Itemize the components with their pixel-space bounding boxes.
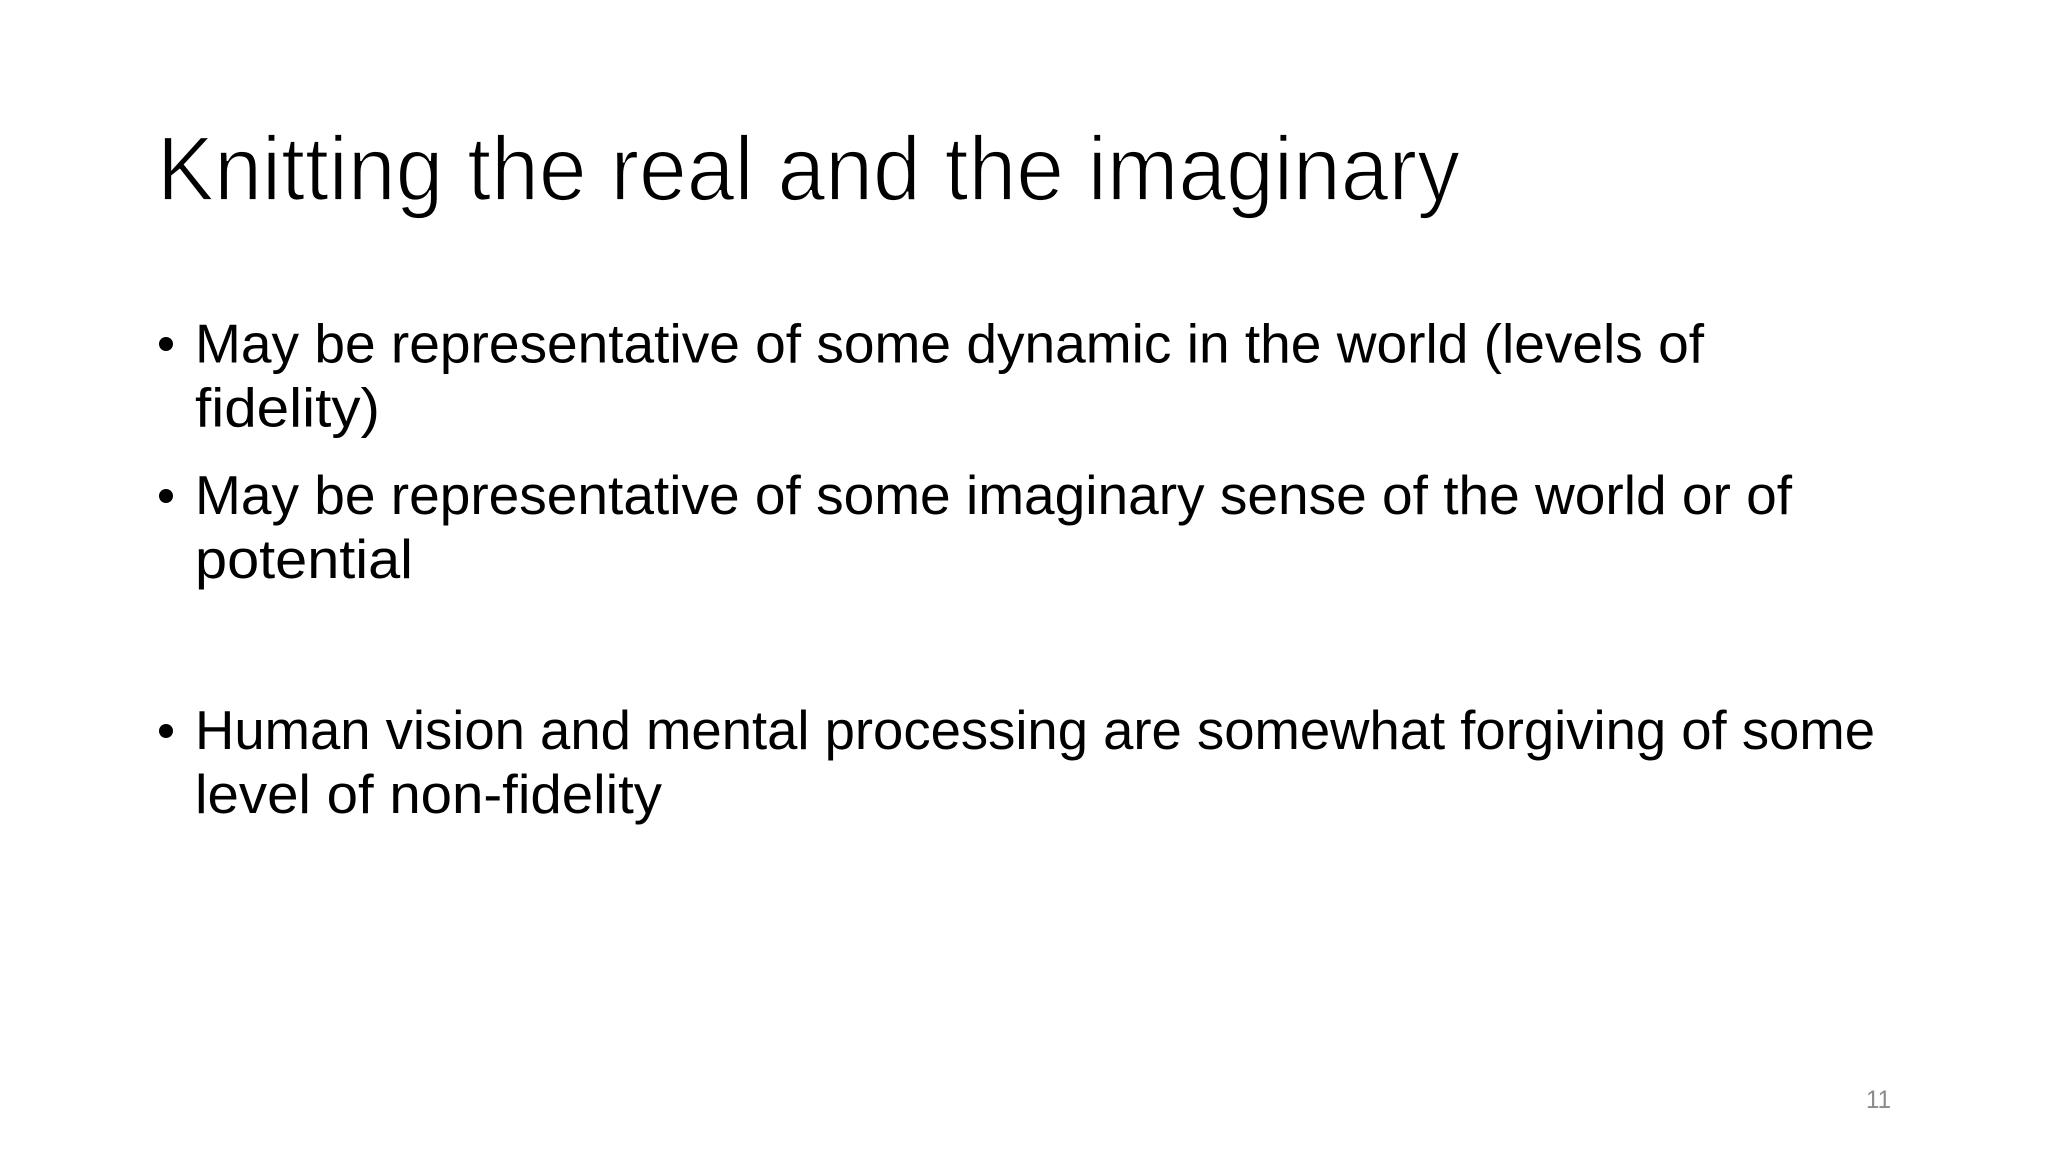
bullet 2: potential bbox=[195, 528, 413, 590]
bullet 1: May be representative of some dynamic in the world (levels of bbox=[195, 312, 1705, 374]
bullet 2: May be representative of some imaginary sense of the world or of bbox=[195, 464, 1793, 526]
bullet 2 bbox=[159, 464, 1793, 590]
bullet 3: level of non-fidelity bbox=[195, 763, 663, 825]
bullet 1: fidelity) bbox=[195, 376, 380, 438]
title: Knitting the real and the imaginary bbox=[157, 119, 1460, 220]
bullet 1 bbox=[159, 312, 1705, 438]
page number: 11 bbox=[1866, 1086, 1891, 1114]
bullet 3 bbox=[159, 699, 1875, 825]
bullet list bbox=[159, 312, 1875, 825]
bullet 3: Human vision and mental processing are somewhat forgiving of some bbox=[195, 699, 1875, 761]
